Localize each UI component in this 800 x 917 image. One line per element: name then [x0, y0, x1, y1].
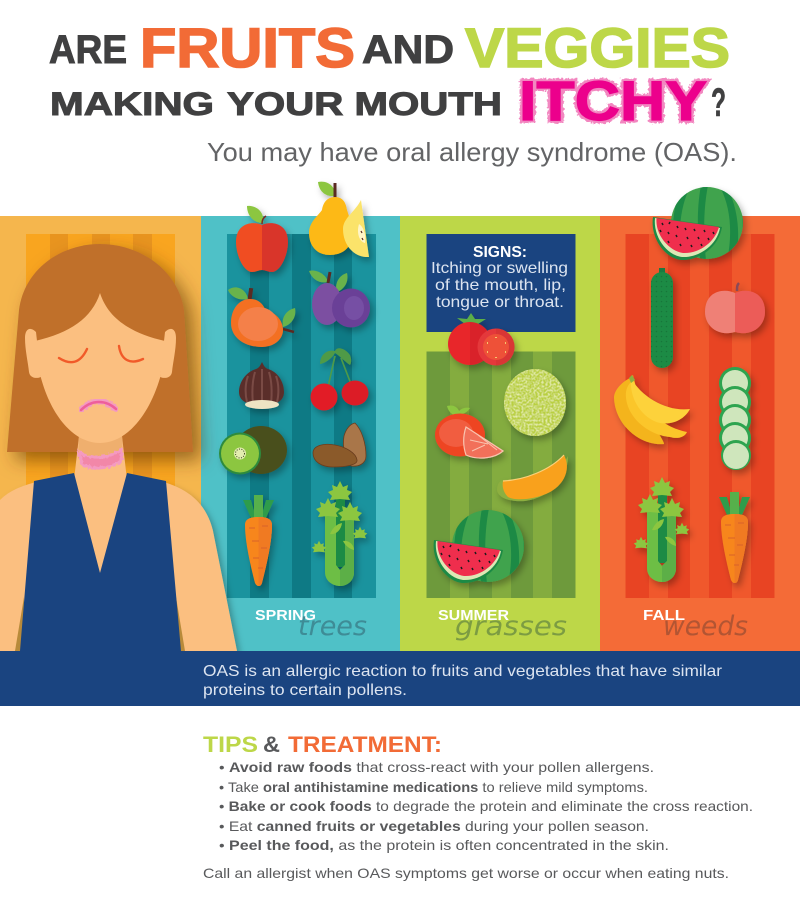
heading: tips and treatment [203, 732, 442, 757]
fruit: pear with slice [309, 182, 369, 257]
fruit: kiwi [219, 426, 287, 474]
title: YOUR MOUTH [227, 86, 502, 122]
panel: person background [0, 216, 201, 652]
navy vest [20, 473, 181, 651]
banner: OAS definition [0, 651, 800, 706]
fruit: cantaloupe slice [497, 455, 568, 501]
panel: summer [400, 216, 600, 652]
title: ITCHY [519, 69, 707, 132]
fruit: bananas [614, 375, 690, 444]
vegetable: cucumber slices [719, 367, 751, 470]
panel: fall [600, 216, 800, 652]
fruit: fall watermelon [653, 185, 749, 263]
vegetable: cucumber [651, 268, 673, 368]
fruit: pink apple [705, 283, 765, 333]
fruit: grapefruit with slice [435, 405, 503, 458]
vegetable: fall celery [634, 477, 689, 582]
label: fall weeds: weeds [663, 611, 748, 642]
banner: OAS definition: OAS is an allergic reaction to fruits and vegetables that have similar [203, 663, 723, 680]
list: tips: • Take oral antihistamine medications to relieve mild symptoms. [219, 779, 648, 795]
fruit: summer watermelon [434, 508, 530, 586]
title: FRUITS [140, 16, 355, 79]
panel: spring [201, 216, 400, 652]
list: tips: • Bake or cook foods to degrade the protein and eliminate the cross reaction. [219, 798, 753, 814]
vegetable: fall carrot [719, 492, 750, 583]
vegetable: spring carrot [243, 495, 274, 586]
callout: signs [426, 234, 576, 332]
nuts: almonds [313, 423, 366, 467]
fruit: cherries [310, 348, 368, 410]
callout: signs: tongue or throat. [436, 294, 564, 311]
label: spring trees: trees [298, 611, 367, 642]
fruit: red apple [236, 206, 288, 272]
itchy mouth [81, 401, 116, 410]
title: ARE [49, 28, 127, 72]
callout: signs: of the mouth, lip, [435, 277, 566, 294]
banner: OAS definition: proteins to certain pollens. [203, 682, 407, 699]
callout: signs: Itching or swelling [431, 260, 568, 277]
heading: tips and treatment: & [263, 732, 280, 757]
label: summer grasses: SUMMER [438, 607, 509, 624]
title: ITCHY [519, 69, 707, 132]
callout: signs: SIGNS: [473, 244, 527, 261]
title: ? [711, 81, 726, 125]
heading: tips and treatment: TIPS [203, 732, 258, 757]
title: MAKING [50, 86, 214, 122]
subtitle: You may have oral allergy syndrome (OAS). [207, 137, 737, 167]
list: tips [219, 759, 753, 853]
text: call an allergist: Call an allergist when OAS symptoms get worse or occur when eating nuts. [203, 865, 729, 881]
title: AND [362, 28, 454, 72]
illustration: woman with itchy mouth [0, 244, 237, 651]
vegetable: tomato with slice [448, 313, 514, 366]
fruit: plums [309, 271, 370, 328]
label: fall weeds: FALL [643, 607, 685, 624]
title [49, 16, 730, 132]
fruit: peach [228, 287, 295, 347]
list: tips: • Peel the food, as the protein is often concentrated in the skin. [219, 837, 669, 853]
shoulders [0, 481, 237, 651]
nut: chestnut [239, 362, 284, 409]
label: spring trees [255, 607, 367, 642]
neck rash [79, 450, 122, 468]
heading: tips and treatment: TREATMENT: [288, 732, 442, 757]
fruit: honeydew melon [504, 369, 566, 436]
title: VEGGIES [465, 16, 730, 79]
label: summer grasses: grasses [455, 611, 567, 642]
vegetable: spring celery [312, 481, 367, 586]
list: tips: • Eat canned fruits or vegetables during your pollen season. [219, 818, 649, 834]
eyes [59, 346, 143, 362]
list: tips: • Avoid raw foods that cross-react with your pollen allergens. [219, 759, 654, 775]
label: spring trees: SPRING [255, 607, 316, 624]
